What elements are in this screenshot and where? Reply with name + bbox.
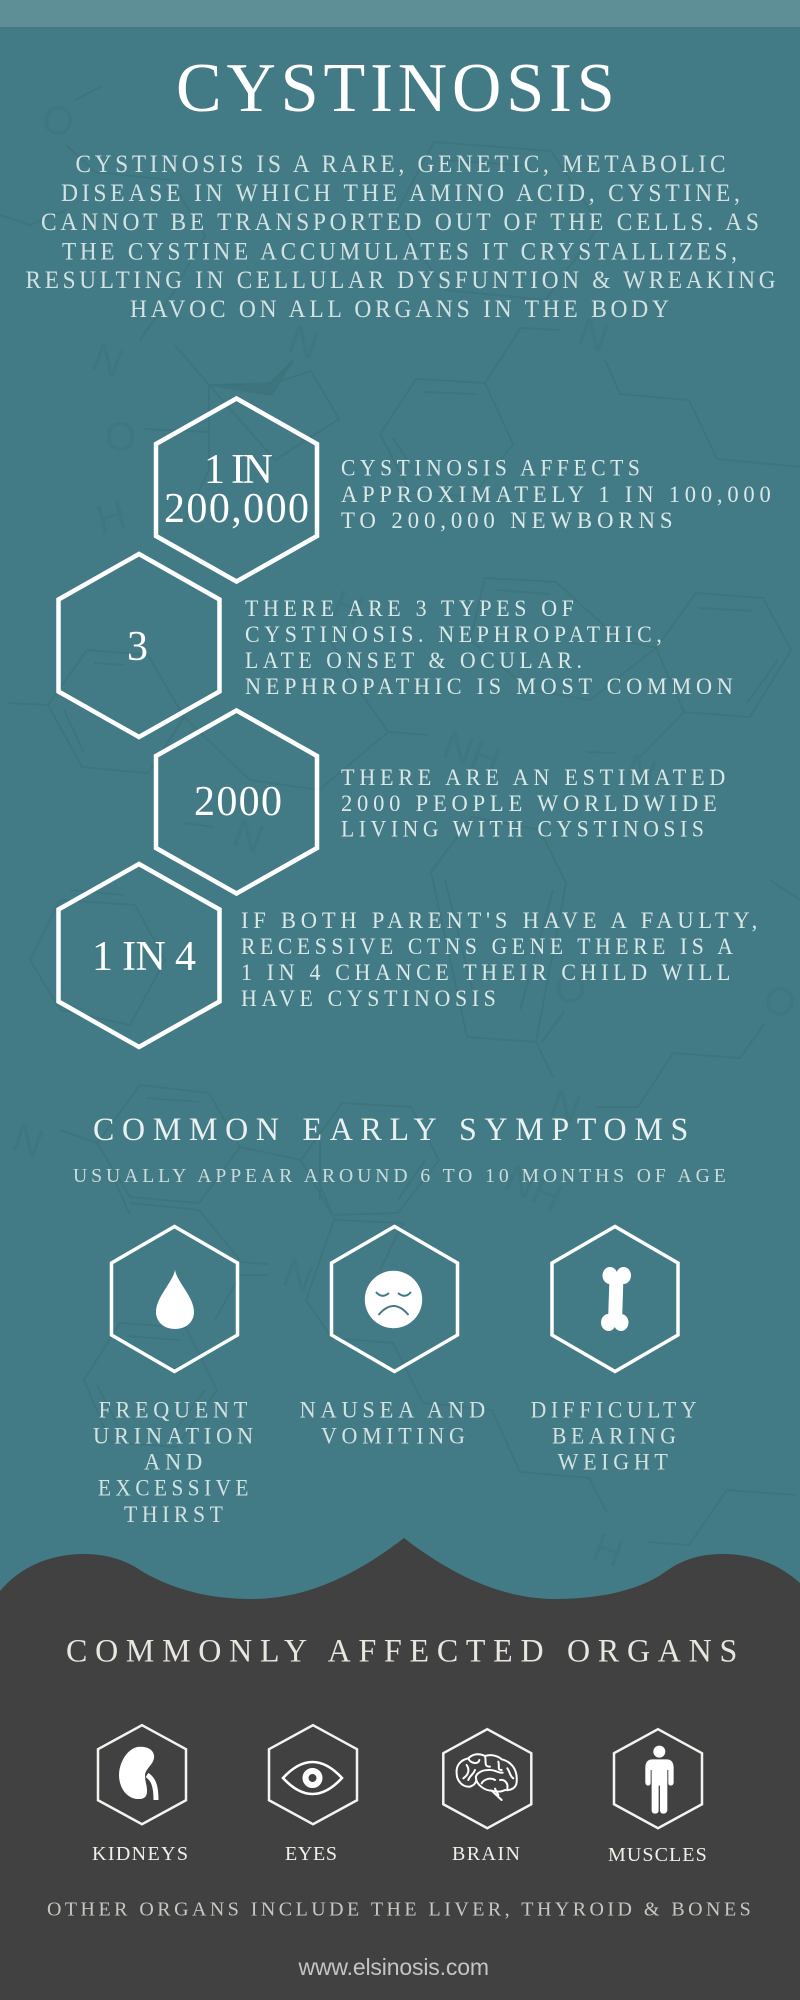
hexagon	[269, 1725, 357, 1824]
pattern letters: H	[327, 582, 369, 633]
stat description: CYSTINOSIS AFFECTS	[341, 456, 644, 482]
stat: 3 types	[58, 554, 738, 737]
stat number: 1 IN 4	[92, 934, 196, 980]
stat number: 2000	[194, 779, 282, 825]
label: NAUSEA AND	[300, 1398, 490, 1424]
stat description: THERE ARE AN ESTIMATED	[341, 765, 730, 791]
label: VOMITING	[321, 1424, 470, 1450]
label: EXCESSIVE	[98, 1476, 253, 1502]
pattern letters	[7, 96, 800, 1576]
stat: 1 in 4	[58, 864, 762, 1047]
stat number: 3	[127, 624, 148, 670]
pattern letters: N	[86, 335, 129, 386]
stat description: LIVING WITH CYSTINOSIS	[341, 817, 708, 843]
stat description: CYSTINOSIS. NEPHROPATHIC,	[245, 622, 666, 648]
top band	[0, 0, 800, 27]
stat description: RECESSIVE CTNS GENE THERE IS A	[241, 934, 738, 960]
stat description: 2000 PEOPLE WORLDWIDE	[341, 791, 722, 817]
label: DIFFICULTY	[531, 1398, 701, 1424]
pattern letters: N	[572, 310, 614, 361]
hexagon	[156, 710, 317, 894]
icon: person	[645, 1746, 674, 1814]
symptom: nausea	[300, 1226, 490, 1450]
pattern letters: N	[620, 746, 662, 797]
stat number: 200,000	[164, 486, 309, 532]
label	[300, 1398, 490, 1450]
symptom: urination	[93, 1226, 258, 1528]
stat: 2000 people	[156, 710, 730, 894]
icon: bone	[601, 1267, 631, 1331]
hexagon	[443, 1729, 531, 1828]
title: CYSTINOSIS	[176, 50, 620, 127]
organ: eyes	[269, 1725, 357, 1865]
stat description: NEPHROPATHIC IS MOST COMMON	[245, 674, 738, 700]
hexagon	[58, 554, 220, 737]
intro text block: HAVOC ON ALL ORGANS IN THE BODY	[130, 296, 673, 323]
label: URINATION	[93, 1424, 258, 1450]
pattern letters: O	[36, 96, 80, 147]
stat description: TO 200,000 NEWBORNS	[341, 508, 678, 534]
pattern letters: NH	[437, 723, 507, 784]
stat number	[164, 447, 309, 532]
hexagon	[552, 1226, 678, 1372]
website: www.elsinosis.com	[298, 1954, 489, 1980]
pattern letters: O	[555, 967, 586, 1011]
organ: muscles	[608, 1729, 707, 1866]
pattern letters: N	[282, 317, 325, 369]
hexagon	[156, 398, 317, 582]
label: THIRST	[124, 1502, 228, 1528]
other organs note: OTHER ORGANS INCLUDE THE LIVER, THYROID & BONES	[47, 1899, 754, 1921]
pattern letters: H	[587, 1525, 629, 1576]
subheading: age of onset: USUALLY APPEAR AROUND 6 TO 10 MONTHS OF AGE	[73, 1165, 730, 1187]
heading: commonly affected organs: COMMONLY AFFECTED ORGANS	[66, 1634, 745, 1670]
intro text block: DISEASE IN WHICH THE AMINO ACID, CYSTINE,	[61, 180, 744, 207]
stat description: APPROXIMATELY 1 IN 100,000	[341, 482, 776, 508]
icon: water drop	[156, 1270, 194, 1329]
stat description	[341, 765, 730, 843]
icon: brain	[457, 1754, 517, 1800]
stat description: IF BOTH PARENT'S HAVE A FAULTY,	[241, 908, 762, 934]
stat number: 1 IN	[204, 447, 273, 493]
stat description: HAVE CYSTINOSIS	[241, 986, 500, 1012]
label: MUSCLES	[608, 1844, 707, 1866]
intro text block	[26, 151, 779, 323]
icon: eye	[283, 1762, 342, 1794]
label: EYES	[285, 1843, 337, 1865]
background molecule pattern	[0, 86, 800, 1576]
stat description	[245, 596, 738, 700]
hexagon	[98, 1725, 186, 1824]
hexagon	[614, 1729, 702, 1828]
stat: 1 in 200,000	[156, 398, 776, 582]
pattern letters: N	[277, 1251, 319, 1302]
icon: sad face	[365, 1271, 422, 1328]
pattern letters: H	[92, 492, 131, 542]
intro text block: THE CYSTINE ACCUMULATES IT CRYSTALLIZES,	[62, 238, 741, 266]
label	[531, 1398, 701, 1476]
organ: kidneys	[92, 1725, 188, 1865]
pattern letters: O	[105, 415, 136, 459]
label: AND	[144, 1450, 207, 1476]
heading: common early symptoms: COMMON EARLY SYMPTOMS	[93, 1112, 696, 1148]
stat description: 1 IN 4 CHANCE THEIR CHILD WILL	[241, 960, 735, 986]
label: BEARING	[552, 1424, 680, 1450]
intro text block: CANNOT BE TRANSPORTED OUT OF THE CELLS. AS	[41, 209, 763, 236]
hexagon	[58, 864, 220, 1047]
label: FREQUENT	[98, 1398, 252, 1424]
symptom: bone	[531, 1226, 701, 1476]
organ: brain	[443, 1729, 531, 1865]
pattern letters: N	[544, 1081, 586, 1133]
icon: kidney	[119, 1747, 156, 1800]
hexagon	[332, 1226, 458, 1372]
intro text block: CYSTINOSIS IS A RARE, GENETIC, METABOLIC	[76, 151, 729, 178]
stat description: THERE ARE 3 TYPES OF	[245, 596, 578, 622]
label: BRAIN	[452, 1843, 520, 1865]
stat description	[341, 456, 776, 534]
pattern letters: NH	[498, 1156, 569, 1221]
stat description: LATE ONSET & OCULAR.	[245, 648, 586, 674]
panel: dark wave footer	[0, 1538, 800, 2000]
stat description	[241, 908, 762, 1012]
label	[93, 1398, 258, 1528]
pattern letters: N	[227, 811, 269, 862]
hexagon	[112, 1226, 238, 1372]
label: WEIGHT	[558, 1450, 673, 1476]
label: KIDNEYS	[92, 1843, 188, 1865]
pattern letters: N	[7, 1116, 49, 1167]
